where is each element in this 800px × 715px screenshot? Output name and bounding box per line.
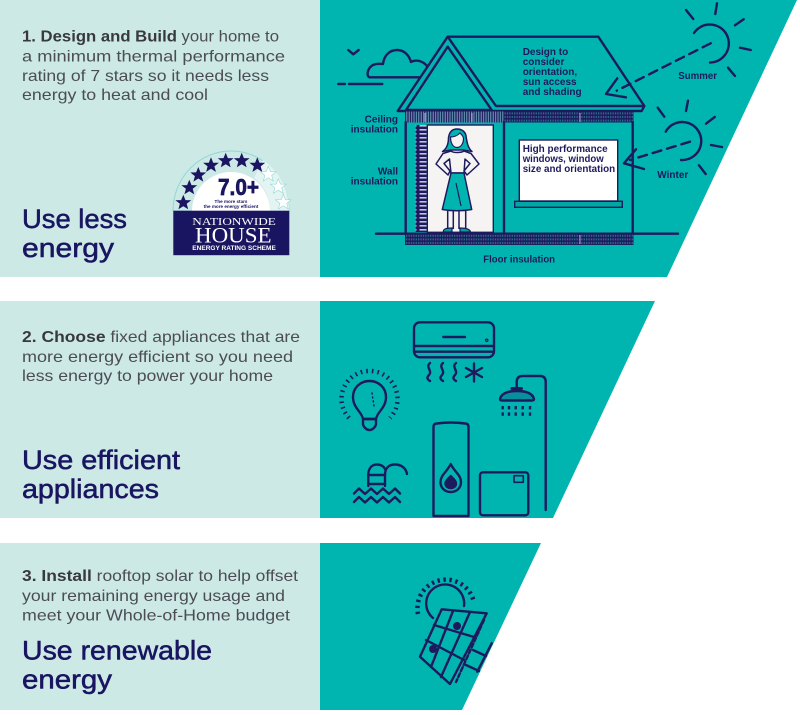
- labels: house: [351, 47, 717, 266]
- labels: house: insulation: [351, 176, 398, 187]
- window: [519, 140, 618, 201]
- text: step 3: 3. Install rooftop solar to help offset: [22, 568, 299, 585]
- labels: house: and shading: [523, 87, 582, 98]
- labels: house: High performance: [523, 144, 608, 155]
- illustration: house: [376, 37, 678, 245]
- heading: use less energy: [22, 204, 127, 263]
- badge: nationwide house energy rating: ENERGY RATING SCHEME: [192, 245, 276, 252]
- labels: house: consider: [523, 57, 564, 68]
- walls: [406, 122, 633, 233]
- labels: house: Summer: [678, 71, 717, 82]
- panel: use less energy: [0, 0, 797, 277]
- illustration: cloud and bird: [338, 50, 427, 84]
- text: step 2: 2. Choose fixed appliances that are: [22, 329, 300, 346]
- text: step 2: [22, 329, 300, 385]
- arrow: summer sun: [606, 43, 711, 97]
- heading: use efficient appliances: Use efficient: [22, 445, 181, 475]
- text: step 2: more energy efficient so you need: [22, 349, 293, 366]
- text: step 1: a minimum thermal performance: [22, 48, 285, 66]
- heading: use renewable energy: [22, 636, 212, 694]
- icon: light bulb: [342, 371, 398, 430]
- icon: solar panel and sun: [417, 580, 492, 684]
- window sill: [515, 201, 622, 207]
- icon: summer sun: [686, 3, 751, 76]
- person: [436, 129, 479, 232]
- text: step 1: energy to heat and cool: [22, 87, 208, 104]
- text: step 3: your remaining energy usage and: [22, 588, 285, 605]
- badge: nationwide house energy rating: the more energy efficient: [204, 204, 259, 209]
- house roof: [398, 37, 644, 111]
- icon: winter sun: [658, 101, 722, 174]
- labels: house: Ceiling: [365, 115, 398, 126]
- badge: nationwide house energy rating: NATIONWIDE: [192, 217, 276, 228]
- heading: use less energy: energy: [22, 233, 115, 263]
- doorway: [427, 125, 493, 232]
- panel: use efficient appliances: [0, 301, 655, 518]
- badge: nationwide house energy rating: HOUSE: [195, 222, 272, 248]
- text: step 1: 1. Design and Build your home to: [22, 28, 279, 46]
- text: step 1: rating of 7 stars so it needs less: [22, 68, 269, 85]
- labels: house: Winter: [657, 170, 688, 181]
- arrow: winter sun: [624, 142, 690, 169]
- text: step 1: [22, 28, 285, 104]
- labels: house: size and orientation: [523, 164, 615, 175]
- icon: hot water tank: [434, 422, 468, 516]
- labels: house: insulation: [351, 125, 398, 136]
- ground line: [376, 232, 678, 235]
- icon: shower: [500, 376, 546, 510]
- heading: use efficient appliances: [22, 445, 181, 504]
- heading: use renewable energy: Use renewable: [22, 636, 212, 666]
- labels: house: orientation,: [523, 67, 577, 78]
- text: step 2: less energy to power your home: [22, 368, 273, 385]
- icon: pool: [354, 464, 407, 502]
- heading: use efficient appliances: appliances: [22, 474, 159, 504]
- badge: nationwide house energy rating: [173, 151, 291, 255]
- labels: house: Floor insulation: [483, 255, 555, 266]
- badge: nationwide house energy rating: The more stars: [215, 199, 248, 204]
- text: step 3: meet your Whole-of-Home budget: [22, 608, 291, 625]
- icon: heat pump unit: [480, 472, 528, 515]
- heading: use renewable energy: energy: [22, 664, 113, 694]
- labels: house: sun access: [523, 77, 577, 88]
- labels: house: Wall: [378, 166, 398, 177]
- panel: use renewable energy: [0, 543, 541, 710]
- wall insulation: [416, 125, 427, 232]
- badge: nationwide house energy rating: 7.0+: [218, 174, 259, 200]
- heading: use less energy: Use less: [22, 204, 127, 234]
- floor insulation band: [405, 234, 634, 245]
- icon: air conditioner: [414, 322, 494, 382]
- text: step 3: [22, 568, 299, 625]
- labels: house: Design to: [523, 47, 568, 58]
- ceiling insulation band: [405, 112, 634, 122]
- labels: house: windows, window: [522, 154, 604, 165]
